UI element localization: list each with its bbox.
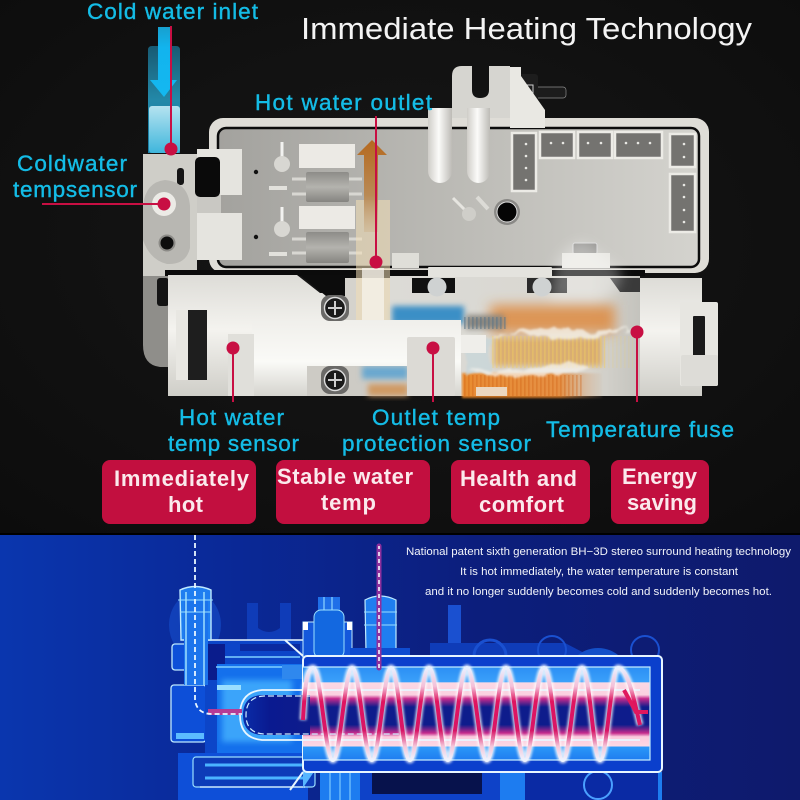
label: coldwater temp sensor: tempsensor xyxy=(13,177,138,202)
badge: health and comfort xyxy=(451,460,590,524)
label: hot water temp sensor xyxy=(168,405,300,456)
badge: energy saving xyxy=(611,460,709,524)
left components xyxy=(254,142,362,263)
left valve block xyxy=(171,640,305,753)
badge: stable water temp: Stable water xyxy=(277,464,413,489)
water heater device xyxy=(143,27,718,398)
pointer: cold water inlet xyxy=(164,26,178,156)
capacitor and pin xyxy=(453,197,520,225)
cold water dashed path xyxy=(195,535,242,714)
label: hot water temp sensor: Hot water xyxy=(179,405,284,430)
badge: health and comfort: Health and xyxy=(460,466,577,491)
arrow: cold water flow xyxy=(150,27,177,97)
badge: energy saving: Energy xyxy=(622,464,698,489)
description text: It is hot immediately, the water temperature is constant xyxy=(460,566,738,578)
screws xyxy=(321,295,349,394)
inlet barb fitting xyxy=(178,586,213,685)
bracket front block xyxy=(510,67,545,128)
hot water pipe and arrow xyxy=(356,140,390,320)
badge: stable water temp xyxy=(276,460,430,524)
label: coldwater temp sensor: Coldwater xyxy=(17,151,128,176)
pointer: hot water temp sensor xyxy=(226,342,240,402)
housing frame xyxy=(209,118,709,273)
connectors xyxy=(512,132,695,232)
lower structure xyxy=(178,740,662,800)
heating chamber with flames xyxy=(390,242,640,398)
label: outlet temp protection sensor: Outlet temp xyxy=(372,405,500,430)
heating tube x-ray diagram xyxy=(169,535,662,800)
label: outlet temp protection sensor: protection sensor xyxy=(342,431,532,456)
cold water pipe xyxy=(148,46,180,153)
top bracket with screw xyxy=(452,66,566,122)
middle fitting xyxy=(303,597,352,660)
connector pins xyxy=(525,142,685,223)
top panel background xyxy=(0,0,800,533)
description text: and it no longer suddenly becomes cold and suddenly becomes hot. xyxy=(425,586,772,598)
bar and round pegs xyxy=(428,267,552,296)
badge: stable water temp: temp xyxy=(321,490,376,515)
badge: energy saving: saving xyxy=(627,490,697,515)
mounts xyxy=(392,243,610,268)
label: hot water outlet: Hot water outlet xyxy=(255,90,433,115)
side screw xyxy=(157,278,169,306)
pointer: outlet temp protection sensor xyxy=(426,342,440,402)
description text: National patent sixth generation BH−3D stereo surround heating technology xyxy=(406,546,792,558)
description text xyxy=(406,546,792,598)
heater end element xyxy=(624,690,648,712)
heating coil xyxy=(303,668,640,760)
background silhouettes xyxy=(169,593,659,712)
inner U-tube xyxy=(240,690,640,740)
pointer: coldwater temp sensor xyxy=(42,198,170,210)
label: temperature fuse: Temperature fuse xyxy=(546,417,734,442)
badge: immediately hot xyxy=(102,460,256,524)
outlet block xyxy=(228,320,486,396)
sensor pointer lines and dots xyxy=(42,26,644,402)
lower notch behind outlet block xyxy=(307,360,408,396)
outlet barb fitting xyxy=(350,596,410,657)
pointer: hot water outlet xyxy=(370,116,382,268)
label: outlet temp protection sensor xyxy=(342,405,532,456)
main lower body xyxy=(165,270,645,396)
tube body xyxy=(285,640,662,790)
badge: health and comfort: comfort xyxy=(479,492,565,517)
pointer: temperature fuse xyxy=(630,326,644,402)
badge: immediately hot: hot xyxy=(168,492,204,517)
label: hot water temp sensor: temp sensor xyxy=(168,431,300,456)
white tubes xyxy=(428,108,490,183)
right end block xyxy=(639,278,718,396)
cold side block xyxy=(143,149,242,276)
bottom panel background xyxy=(0,535,800,800)
left gray frame xyxy=(143,260,180,367)
hot water outlet line xyxy=(376,546,382,668)
label: coldwater temp sensor xyxy=(13,151,138,202)
badge: immediately hot: Immediately xyxy=(114,466,250,491)
title: Immediate Heating Technology xyxy=(301,11,753,46)
